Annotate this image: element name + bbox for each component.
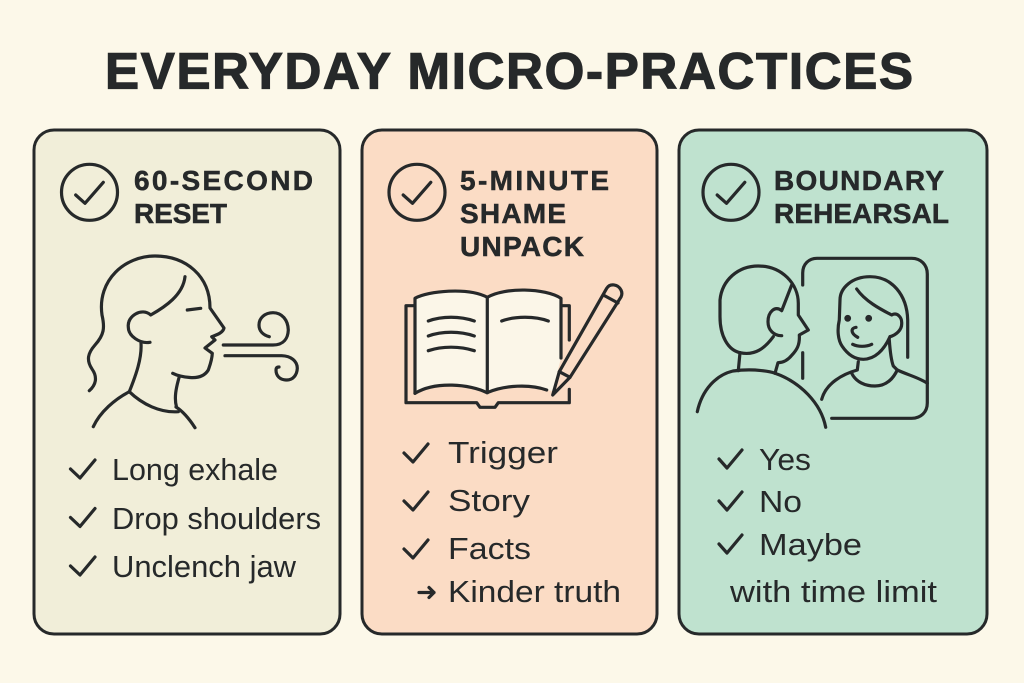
list: unpack steps: Story: [448, 483, 531, 518]
heading: 5-minute shame unpack: [460, 165, 609, 262]
list: reset steps: Unclench jaw: [112, 549, 297, 584]
title: EVERYDAY MICRO-PRACTICES: [105, 42, 913, 100]
heading: 5-minute shame unpack: 5-MINUTE: [460, 165, 609, 196]
list: reset steps: [70, 452, 321, 584]
list: boundary responses: with time limit: [729, 574, 937, 609]
panel: 5-minute shame unpack: [362, 130, 657, 634]
heading: 5-minute shame unpack: UNPACK: [460, 231, 584, 262]
list: boundary responses: Maybe: [759, 527, 862, 562]
list: boundary responses: No: [759, 484, 802, 519]
list: unpack steps: [404, 435, 621, 609]
icon: check circle: [62, 164, 118, 220]
icon: check circle: [703, 164, 759, 220]
heading: 60-second reset: 60-SECOND: [134, 165, 313, 196]
heading: 60-second reset: RESET: [134, 198, 227, 229]
list: boundary responses: Yes: [759, 442, 811, 477]
icon: check circle: [389, 164, 445, 220]
list: boundary responses: [719, 442, 937, 609]
heading: boundary rehearsal: REHEARSAL: [774, 198, 949, 229]
list: reset steps: Long exhale: [112, 452, 278, 487]
heading: boundary rehearsal: [774, 165, 949, 229]
heading: 5-minute shame unpack: SHAME: [460, 198, 566, 229]
heading: 60-second reset: [134, 165, 313, 229]
list: reset steps: Drop shoulders: [112, 501, 321, 536]
list: unpack steps: Facts: [448, 531, 531, 566]
list: unpack steps: Kinder truth: [448, 574, 621, 609]
icon: person exhaling: [88, 256, 297, 428]
icon: journal and pencil: [406, 285, 622, 407]
icon: person at mirror: [697, 258, 927, 427]
list: unpack steps: Trigger: [448, 435, 558, 470]
panel: 60-second reset: [34, 130, 340, 634]
heading: boundary rehearsal: BOUNDARY: [774, 165, 944, 196]
panel: boundary rehearsal: [679, 130, 987, 634]
